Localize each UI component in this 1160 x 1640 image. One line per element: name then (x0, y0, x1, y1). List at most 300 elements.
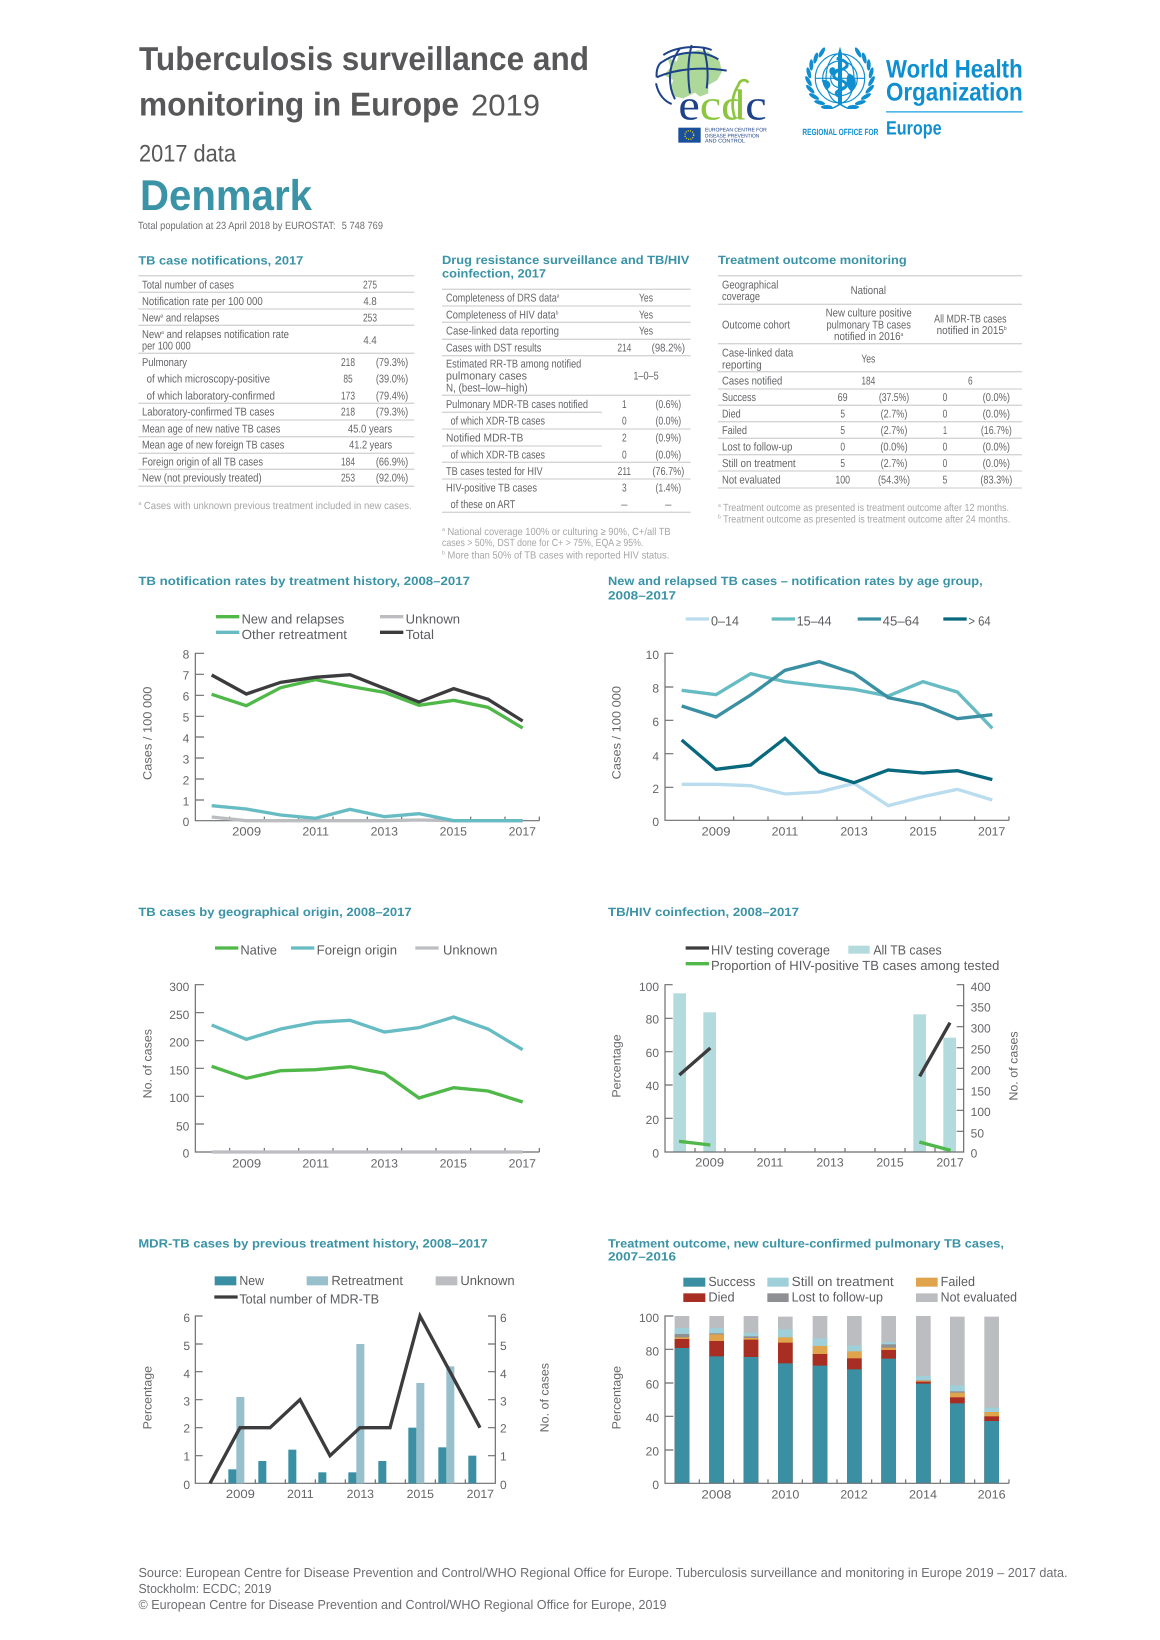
main title (139, 40, 589, 123)
table text: (37.5%) (879, 391, 909, 404)
icon: ECDC logo: AND CONTROL (705, 138, 745, 144)
axis labels (610, 980, 1020, 1169)
panel: TB notification rates chart (138, 574, 539, 838)
table text: 3 (622, 482, 627, 494)
table text: Notification rate per 100 000 (142, 295, 263, 308)
axis labels: 2015 (909, 825, 937, 838)
table text: (76.7%) (652, 465, 684, 478)
axis labels (141, 648, 536, 838)
table text: (66.9%) (376, 455, 408, 468)
axis labels: 2013 (840, 825, 868, 838)
table text: (0.0%) (983, 391, 1010, 404)
axis labels: 0 (183, 815, 189, 829)
footnotes: b (718, 514, 721, 520)
panel: notification rates by age group chart (608, 574, 1009, 838)
legend: Unknown (406, 612, 460, 626)
table text: 4.8 (363, 295, 377, 308)
table text: Still on treatment (722, 457, 796, 470)
table text: 184 (341, 455, 355, 468)
footnotes: cases > 50%, DST done for C+ > 75%, EQA ≥ 95%. (442, 537, 643, 548)
legend: HIV testing coverage (711, 943, 830, 957)
axis labels: 2017 (509, 825, 536, 838)
footnotes: More than 50% of TB cases with reported HIV status. (445, 549, 669, 561)
legend: Retreatment (331, 1273, 403, 1288)
table text: Cases notified (722, 374, 782, 387)
icon: ECDC logo: EUROPEAN CENTRE FOR (705, 127, 767, 133)
axis labels: 6 (500, 1311, 507, 1325)
table text: (1.4%) (655, 482, 681, 494)
footnotes: b (442, 549, 445, 556)
icon: ECDC logo: ecdc (678, 81, 767, 129)
axis labels: 150 (169, 1063, 189, 1077)
table text: 5 (840, 407, 845, 420)
axis labels: 80 (646, 1344, 659, 1358)
axis labels: 20 (646, 1113, 659, 1127)
axis labels: 8 (652, 682, 659, 695)
axis labels: 2017 (978, 825, 1005, 838)
axis labels: No. of cases (537, 1363, 551, 1432)
heading: TB case notifications, 2017 (138, 253, 303, 267)
table text: per 100 000 (142, 340, 191, 352)
bars (228, 1344, 476, 1483)
axis labels: 0 (652, 815, 659, 829)
axis labels: No. of cases (1006, 1031, 1020, 1101)
country name: Denmark (140, 172, 312, 220)
table text: a (557, 293, 559, 299)
table text: Estimated RR-TB among notified (446, 358, 581, 370)
axis labels (141, 980, 536, 1170)
axes (195, 985, 539, 1152)
table text: 184 (861, 374, 875, 387)
table text: (54.3%) (878, 474, 910, 486)
table rules (138, 276, 414, 486)
table text: 4.4 (363, 334, 377, 347)
axes (665, 653, 1009, 820)
table text: (92.0%) (376, 472, 408, 484)
table text: Pulmonary (142, 356, 187, 369)
table text: Completeness of HIV data (446, 308, 578, 321)
table text: pulmonary cases (446, 370, 527, 382)
axis labels: 2009 (695, 1156, 724, 1169)
axis labels: 2015 (407, 1487, 434, 1501)
table text: Lost to follow-up (722, 441, 792, 453)
axis labels: 1 (183, 794, 189, 808)
footnotes: Treatment outcome as presented is treatment outcome after 24 months. (721, 513, 1010, 525)
axis labels: 2008 (701, 1487, 731, 1501)
table text: (0.0%) (983, 457, 1010, 470)
axis labels: 80 (646, 1012, 659, 1026)
axis labels: 0 (652, 1478, 659, 1492)
table text: (0.0%) (655, 448, 681, 461)
axes (195, 653, 539, 821)
table text: Outcome cohort (722, 318, 790, 331)
axis labels: 60 (646, 1046, 659, 1060)
table text: (98.2%) (652, 341, 685, 354)
table text: New (142, 328, 165, 341)
table text: National (851, 284, 886, 297)
table text: (0.0%) (983, 441, 1010, 453)
table text: Yes (639, 308, 653, 321)
table text: coverage (722, 290, 760, 303)
logos (656, 45, 1023, 144)
axis labels: 0 (183, 1478, 190, 1492)
axis labels: 0 (652, 1146, 659, 1160)
axis labels: 0 (183, 1147, 189, 1160)
table text: Cases with DST results (446, 341, 541, 354)
axis labels: 0 (500, 1478, 507, 1492)
legend: Not evaluated (941, 1290, 1017, 1305)
table text: 218 (341, 356, 355, 369)
table text: (79.3%) (376, 356, 408, 369)
table text: Yes (639, 325, 653, 337)
table text: of these on ART (451, 498, 515, 511)
table text: pulmonary TB cases (826, 318, 911, 331)
axis labels: 100 (971, 1105, 991, 1119)
table text: 173 (341, 389, 355, 402)
heading (608, 1236, 1004, 1263)
table text: 1 (943, 424, 947, 437)
stacked bars (675, 1316, 999, 1483)
table text: 1 (622, 398, 627, 411)
axis labels: 2013 (371, 1156, 398, 1170)
axis labels: 2 (183, 773, 189, 787)
table text: 5 (840, 424, 845, 437)
table text: b (1004, 325, 1007, 331)
main title: monitoring in Europe (139, 86, 459, 123)
panel: drug resistance table (442, 253, 691, 561)
table text: Laboratory-confirmed TB cases (142, 406, 274, 418)
table text: New culture positive (826, 307, 912, 319)
table text: 214 (617, 341, 631, 354)
table text: (79.3%) (376, 406, 408, 418)
heading: MDR-TB cases by previous treatment history, 2008–2017 (138, 1236, 488, 1250)
table text: 253 (341, 472, 355, 484)
table text: (0.0%) (880, 441, 908, 453)
table text: and relapses notification rate (164, 328, 289, 341)
table text: 0 (622, 415, 627, 427)
axis labels: 5 (500, 1339, 507, 1353)
source footer (138, 1565, 1068, 1612)
heading (442, 253, 689, 280)
table text: 5 (840, 457, 845, 470)
table text: of which XDR-TB cases (451, 415, 545, 427)
axis labels: 100 (639, 980, 659, 994)
table text: 211 (618, 465, 631, 478)
axis labels: 250 (971, 1043, 991, 1056)
table text: New (not previously treated) (142, 472, 262, 484)
table text: N, (best–low–high) (446, 381, 528, 394)
legend: Still on treatment (792, 1274, 894, 1289)
axis labels: 50 (176, 1119, 189, 1133)
axis labels: 5 (183, 1339, 190, 1353)
table text: Yes (861, 352, 875, 365)
table text: Success (722, 391, 756, 404)
axis labels: 100 (639, 1311, 659, 1325)
data lines (679, 1023, 951, 1150)
legend: 15–44 (797, 614, 832, 629)
axis labels: 40 (646, 1079, 659, 1093)
heading: TB notification rates by treatment history, 2008–2017 (138, 574, 470, 588)
heading: New and relapsed TB cases – notification rates by age group, (608, 574, 983, 588)
footnotes: National coverage 100% or culturing ≥ 90%, C+/all TB (445, 526, 671, 537)
icon: ECDC logo (656, 45, 767, 144)
axis labels: 7 (183, 669, 189, 682)
table text: (39.0%) (376, 373, 408, 385)
axis labels: 2014 (909, 1487, 937, 1501)
axis labels: 2012 (840, 1487, 868, 1501)
panel: TB case notifications table (138, 253, 414, 511)
axis labels (610, 648, 1005, 838)
axis labels: 60 (646, 1378, 659, 1391)
table text: 2 (622, 432, 627, 444)
axis labels: 2009 (701, 825, 730, 838)
table text: a (161, 329, 164, 335)
axis labels: 150 (971, 1084, 991, 1098)
axes (665, 1316, 1009, 1483)
axis labels: 6 (652, 715, 659, 729)
footnote: Cases with unknown previous treatment included in new cases. (141, 500, 412, 511)
axis labels: 300 (971, 1022, 991, 1035)
axis labels: 2011 (302, 1156, 329, 1170)
source footer: © European Centre for Disease Prevention and Control/WHO Regional Office for Europe, 2019 (138, 1597, 666, 1612)
axis labels: No. of cases (141, 1029, 154, 1098)
icon: WHO emblem (804, 46, 876, 109)
table text: a (161, 312, 163, 319)
data year: 2017 data (139, 141, 237, 168)
table text: 0 (943, 441, 947, 453)
table text: of which XDR-TB cases (451, 448, 545, 461)
table text: 6 (968, 374, 973, 387)
heading: coinfection, 2017 (442, 266, 546, 280)
WHO wordmark: World Health (886, 55, 1023, 83)
WHO wordmark: REGIONAL OFFICE FOR (802, 127, 878, 137)
table text: 100 (835, 474, 850, 486)
table text: of which laboratory-confirmed (147, 389, 275, 402)
legend: New and relapses (242, 612, 344, 626)
table text: (0.9%) (655, 432, 681, 444)
table text: 275 (363, 278, 377, 291)
source footer: Source: European Centre for Disease Prevention and Control/WHO Regional Office for Europe. Tuberculosis surveillance and monitoring in Europe 2019 – 2017 data. (138, 1565, 1068, 1580)
panel: treatment outcome monitoring table (718, 253, 1022, 525)
data lines (682, 662, 992, 806)
axis labels: 200 (169, 1036, 189, 1049)
total line (210, 1316, 480, 1483)
panel: MDR-TB chart (138, 1236, 551, 1501)
title year: 2019 (471, 90, 540, 123)
table text: Died (722, 407, 741, 420)
axis labels: 2009 (232, 825, 261, 838)
axis labels: Cases / 100 000 (610, 686, 623, 779)
heading: Treatment outcome, new culture-confirmed pulmonary TB cases, (608, 1236, 1004, 1250)
table text: Failed (722, 424, 747, 437)
axis labels: 4 (183, 1367, 190, 1381)
axis labels: 3 (183, 752, 189, 766)
table text: (2.7%) (881, 407, 907, 420)
table rules (442, 289, 691, 512)
legend: > 64 (968, 614, 991, 629)
WHO wordmark (802, 55, 1023, 139)
axis labels: 2011 (772, 825, 798, 838)
axis labels: 50 (971, 1126, 984, 1140)
axis labels: 1 (500, 1450, 507, 1463)
axis labels: 2 (500, 1422, 507, 1435)
axis labels: 40 (646, 1411, 659, 1425)
heading: Drug resistance surveillance and TB/HIV (442, 253, 689, 267)
axis labels: 2 (652, 782, 659, 796)
table text: 45.0 years (348, 422, 392, 435)
table text: 1–0–5 (633, 370, 659, 382)
footnotes: Treatment outcome as presented is treatment outcome after 12 months. (721, 502, 1009, 513)
legend (215, 943, 497, 957)
table text: All MDR-TB cases (934, 312, 1006, 325)
footnote: a (138, 500, 141, 506)
table text: – (621, 498, 628, 511)
table text: 0 (943, 407, 947, 420)
axis labels: 2011 (757, 1156, 783, 1169)
table text: Case-linked data (722, 347, 793, 359)
axis labels: 5 (183, 711, 189, 724)
axis labels: 3 (183, 1395, 190, 1408)
axis labels: 300 (169, 980, 189, 994)
table text: notified in 2015 (937, 324, 1014, 337)
axis labels: 3 (500, 1395, 507, 1408)
table text: b (556, 309, 558, 316)
axis labels: 2009 (232, 1156, 261, 1170)
table text: Total number of cases (142, 278, 234, 291)
table text: (0.6%) (655, 398, 681, 411)
table text (142, 278, 408, 484)
table text: Notified MDR-TB (446, 432, 523, 444)
heading: 2007–2016 (608, 1250, 676, 1263)
axis labels: 2 (183, 1422, 190, 1435)
axis labels: 2011 (287, 1487, 314, 1501)
WHO wordmark: Organization (886, 78, 1023, 106)
table text: Case-linked data reporting (446, 325, 559, 337)
axis labels: 100 (169, 1091, 189, 1105)
legend: Unknown (460, 1273, 515, 1288)
header title block (138, 40, 589, 232)
legend (214, 1273, 515, 1306)
table text: Mean age of new foreign TB cases (142, 439, 284, 451)
table text: Mean age of new native TB cases (142, 422, 280, 435)
axis labels: 350 (971, 1001, 991, 1014)
table text: (83.3%) (980, 474, 1012, 486)
data lines (212, 1017, 523, 1152)
axis labels: 1 (183, 1450, 190, 1463)
source footer: Stockholm: ECDC; 2019 (138, 1581, 272, 1596)
axis labels: 4 (652, 750, 659, 763)
axis labels: 2017 (936, 1156, 964, 1169)
legend: Lost to follow-up (792, 1290, 883, 1305)
legend: Proportion of HIV-positive TB cases among tested (711, 958, 999, 973)
table text: (2.7%) (881, 424, 907, 437)
heading (608, 574, 983, 602)
table rules (718, 276, 1022, 488)
table text: 0 (943, 457, 947, 470)
axis labels: 250 (169, 1008, 189, 1022)
table text: reporting (722, 358, 762, 371)
legend: Unknown (443, 943, 497, 957)
table text: Yes (639, 292, 653, 304)
axis labels: 0 (971, 1146, 977, 1160)
table text: 218 (341, 406, 355, 418)
table text: 253 (363, 311, 377, 324)
table text: – (665, 498, 672, 511)
table text: TB cases tested for HIV (446, 465, 543, 478)
legend: 45–64 (883, 614, 919, 629)
heading: Treatment outcome monitoring (718, 253, 907, 267)
heading: 2008–2017 (608, 588, 676, 602)
table text (446, 292, 685, 511)
axis labels: 2015 (440, 1156, 467, 1170)
axis labels: Percentage (610, 1034, 623, 1098)
footnotes: a (442, 526, 445, 532)
axes (195, 1316, 495, 1483)
footnotes (442, 526, 671, 561)
axis labels: 2015 (440, 825, 467, 838)
axis labels: 6 (183, 1311, 190, 1325)
table text: 69 (838, 391, 848, 404)
footnotes (718, 502, 1010, 525)
axis labels (610, 1311, 1006, 1501)
axis labels: Cases / 100 000 (141, 687, 154, 780)
table text: Pulmonary MDR-TB cases notified (446, 398, 588, 411)
axis labels: 6 (183, 690, 189, 703)
table text: (79.4%) (376, 389, 408, 402)
table text: 0 (840, 441, 845, 453)
axis labels: 4 (500, 1367, 507, 1381)
axis labels: 10 (646, 648, 659, 662)
legend (216, 612, 460, 642)
axis labels: 200 (971, 1063, 991, 1077)
table text: HIV-positive TB cases (446, 482, 537, 494)
table text: Foreign origin of all TB cases (142, 455, 263, 468)
table text: 41.2 years (349, 439, 392, 451)
data lines (212, 675, 523, 821)
axis labels: 4 (183, 731, 189, 745)
table text: 85 (343, 373, 353, 385)
axis labels: 400 (971, 980, 991, 994)
main title: Tuberculosis surveillance and (139, 40, 589, 77)
axis labels: 2011 (302, 825, 329, 838)
axis labels: 2016 (978, 1487, 1006, 1501)
table text: (16.7%) (981, 424, 1012, 437)
axis labels: 2017 (467, 1487, 494, 1501)
bars: all TB cases (673, 993, 956, 1152)
legend: Native (240, 943, 277, 957)
table text: Geographical (722, 278, 778, 291)
axis labels: 20 (646, 1445, 659, 1458)
legend: Foreign origin (317, 943, 397, 957)
legend (686, 943, 999, 973)
panel: geographical origin chart (138, 905, 539, 1170)
legend (686, 614, 991, 629)
WHO wordmark: Europe (886, 117, 942, 139)
table text: 0 (622, 448, 627, 461)
legend: Success (708, 1274, 755, 1289)
legend: 0–14 (711, 614, 739, 629)
axis labels: 2015 (876, 1156, 904, 1169)
legend: New (239, 1273, 264, 1288)
panel: TB/HIV coinfection chart (608, 905, 1020, 1169)
axis labels: 2013 (347, 1487, 374, 1501)
legend: Failed (941, 1274, 975, 1289)
table text: (2.7%) (881, 457, 907, 470)
footnotes: a (718, 502, 721, 508)
table text: New (142, 311, 165, 324)
table text: Completeness of DRS data (446, 292, 583, 304)
axis labels: 2010 (771, 1487, 799, 1501)
